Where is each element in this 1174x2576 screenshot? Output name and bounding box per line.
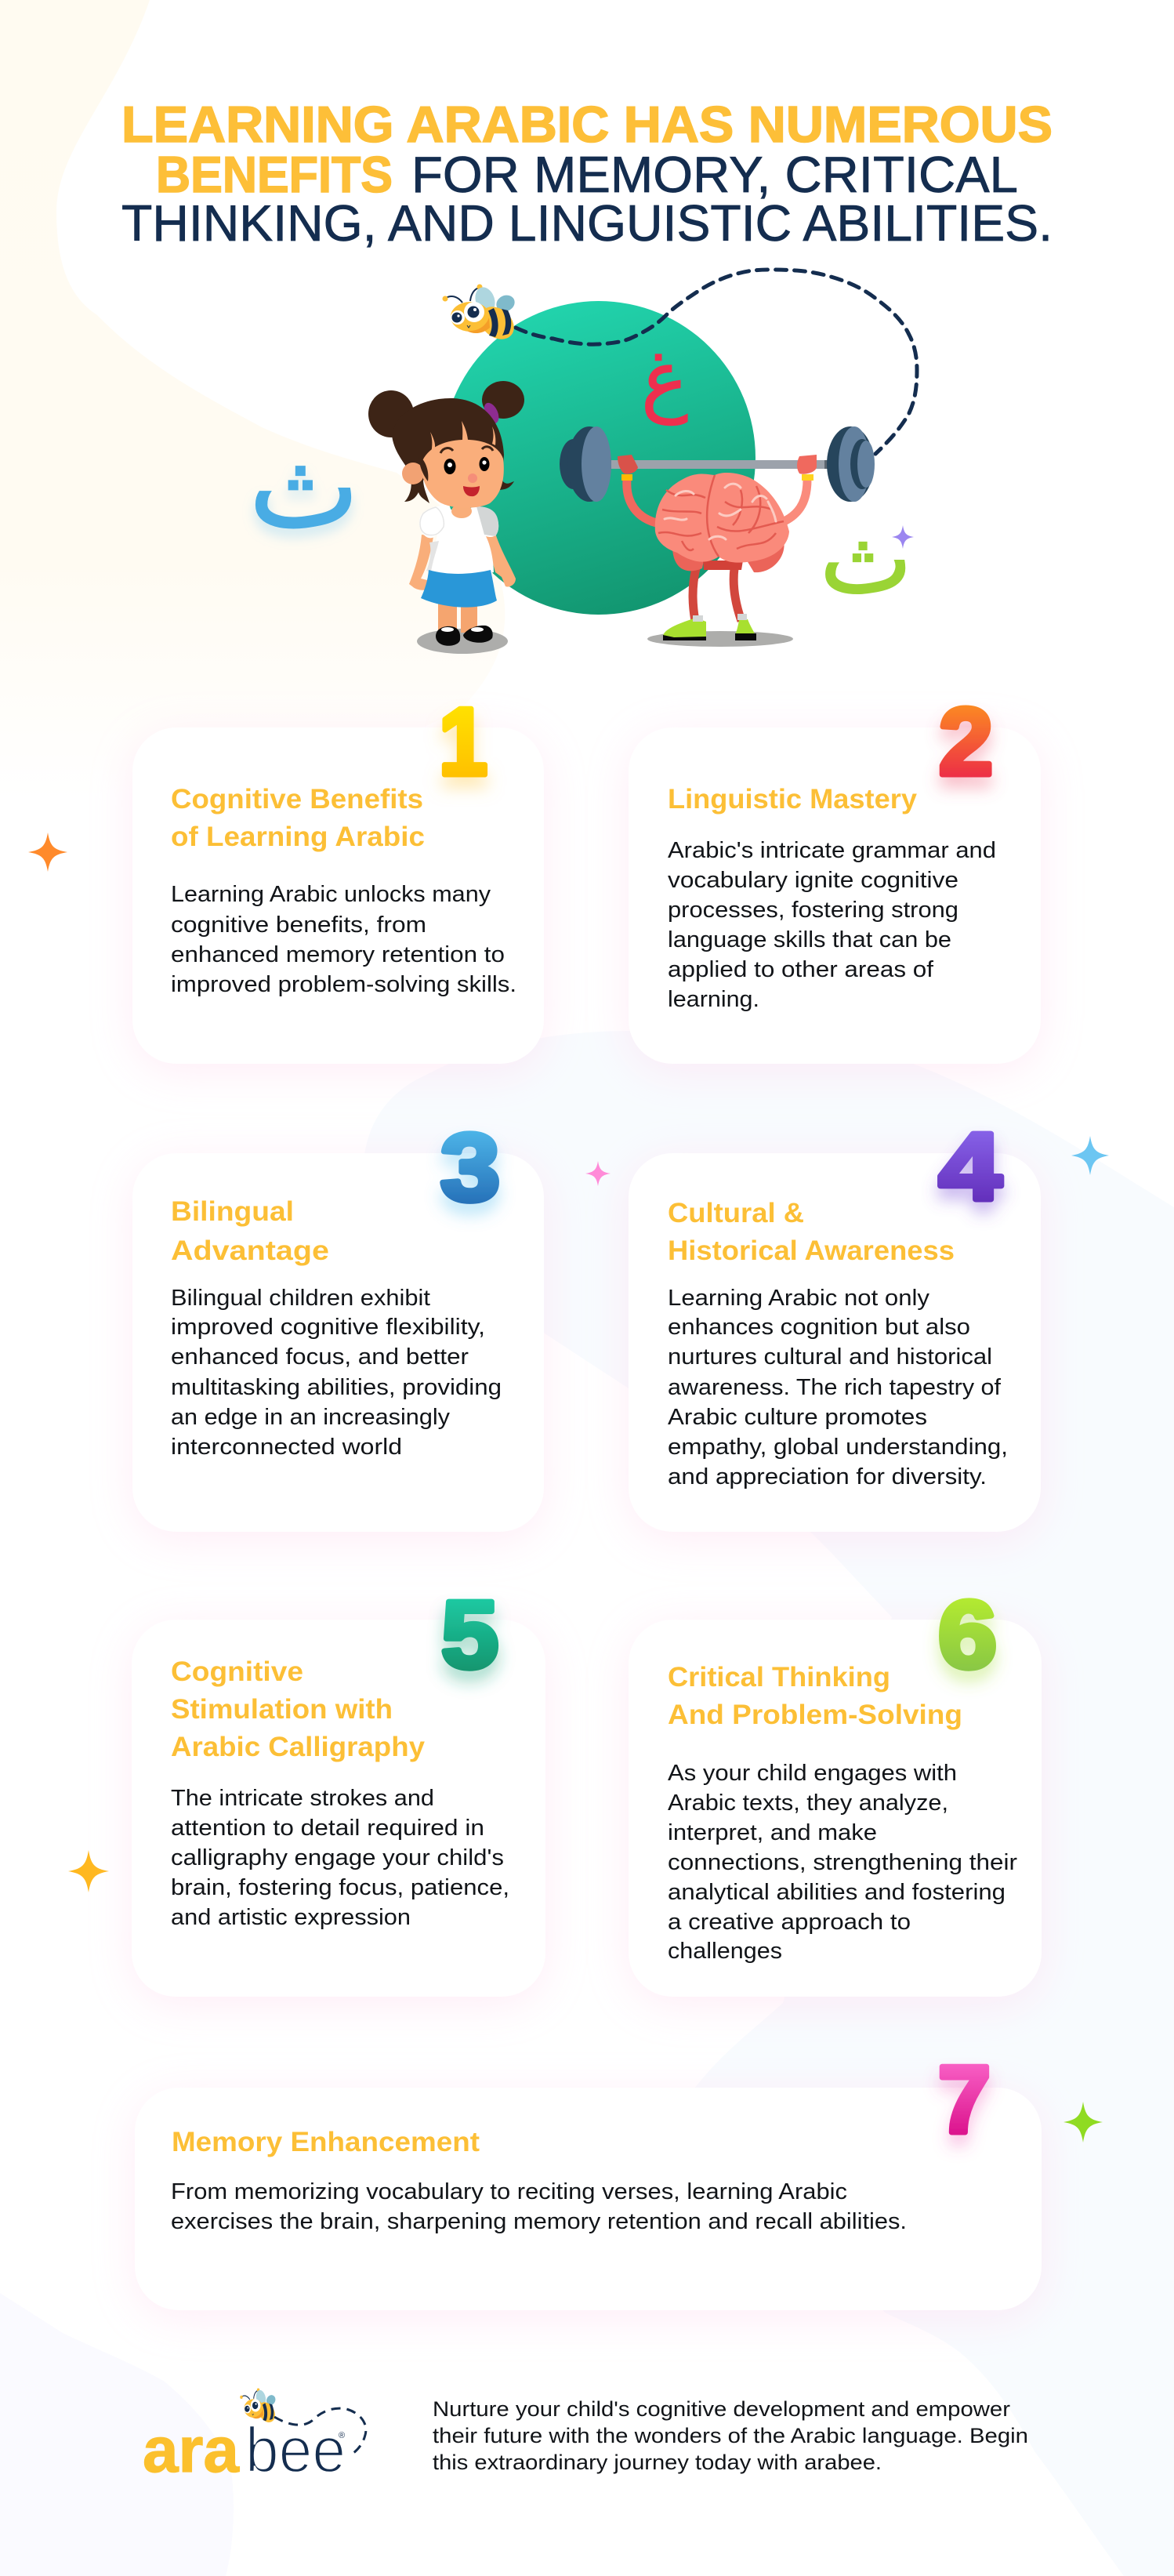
- footer text: Nurture your child's cognitive development and empower: [433, 2397, 1010, 2421]
- body text: The intricate strokes and: [171, 1786, 434, 1811]
- body text: enhances cognition but also: [668, 1315, 970, 1340]
- body text: learning.: [668, 987, 759, 1012]
- heading: Critical Thinking: [668, 1662, 890, 1693]
- heading: [171, 1196, 329, 1266]
- heading: Bilingual: [171, 1196, 294, 1227]
- green circle: [442, 301, 755, 615]
- panel: card 5 calligraphy: [132, 1581, 545, 1997]
- body text: cognitive benefits, from: [171, 912, 426, 938]
- background blob: lavender bottom-left: [0, 2293, 234, 2576]
- body text: [668, 838, 996, 1012]
- heading: [668, 1662, 962, 1730]
- body text: Arabic culture promotes: [668, 1405, 927, 1430]
- panel: card 3 bilingual advantage: [132, 1114, 544, 1532]
- background blob: cream top-left: [0, 0, 505, 800]
- wordmark: ®: [339, 2431, 345, 2440]
- logo: arabee: [143, 2388, 366, 2486]
- body text: nurtures cultural and historical: [668, 1344, 992, 1370]
- body text: From memorizing vocabulary to reciting verses, learning Arabic: [171, 2179, 847, 2204]
- heading: [171, 1656, 426, 1762]
- body text: Arabic's intricate grammar and: [668, 838, 996, 863]
- number 6: 6: [938, 1581, 997, 1688]
- wordmark: ara: [143, 2415, 240, 2486]
- heading: [171, 784, 425, 852]
- panel: card 4 cultural awareness: [629, 1113, 1041, 1532]
- title: [121, 96, 1053, 252]
- heading: Advantage: [171, 1235, 329, 1266]
- footer text: [433, 2397, 1028, 2474]
- body text: calligraphy engage your child's: [171, 1845, 504, 1870]
- wordmark: [143, 2415, 346, 2486]
- body text: and appreciation for diversity.: [668, 1464, 987, 1489]
- heading: Stimulation with: [171, 1694, 393, 1725]
- panel: card 1 cognitive benefits: [132, 688, 544, 1064]
- body text: an edge in an increasingly: [171, 1405, 451, 1430]
- background blob: pale blue: [363, 1030, 1174, 2576]
- sparkle: yellow: [68, 1850, 109, 1892]
- title: FOR MEMORY, CRITICAL: [411, 146, 1018, 203]
- letter: ghain: غ: [641, 333, 688, 425]
- body text: attention to detail required in: [171, 1816, 484, 1841]
- body text: brain, fostering focus, patience,: [171, 1875, 509, 1900]
- body text: interpret, and make: [668, 1820, 877, 1845]
- heading: [668, 1198, 955, 1266]
- brain character: [618, 455, 817, 647]
- sparkle: blue: [1071, 1136, 1109, 1175]
- body text: Learning Arabic not only: [668, 1286, 930, 1311]
- heading: Memory Enhancement: [172, 2127, 480, 2157]
- sparkle: purple: [892, 525, 914, 549]
- heading: of Learning Arabic: [171, 822, 425, 852]
- body text: exercises the brain, sharpening memory retention and recall abilities.: [171, 2209, 907, 2234]
- body text: [171, 1286, 502, 1460]
- body text: enhanced focus, and better: [171, 1344, 469, 1370]
- sparkle: pink: [585, 1161, 611, 1186]
- heading: Historical Awareness: [668, 1235, 955, 1266]
- number 1: 1: [439, 688, 487, 795]
- heading: Cognitive Benefits: [171, 784, 423, 815]
- heading: Linguistic Mastery: [668, 784, 918, 815]
- body text: language skills that can be: [668, 927, 951, 952]
- body text: connections, strengthening their: [668, 1850, 1017, 1875]
- letter: blue tha: ث: [248, 419, 360, 555]
- footer text: their future with the wonders of the Arabic language. Begin: [433, 2424, 1028, 2447]
- panel: card 2 linguistic mastery: [629, 688, 1041, 1064]
- heading: Arabic Calligraphy: [171, 1732, 426, 1762]
- number 5: 5: [441, 1581, 498, 1688]
- body text: improved cognitive flexibility,: [171, 1315, 485, 1340]
- heading: Cognitive: [171, 1656, 303, 1687]
- body text: Learning Arabic unlocks many: [171, 882, 491, 907]
- body text: analytical abilities and fostering: [668, 1880, 1006, 1905]
- number 7: 7: [938, 2046, 991, 2153]
- body text: a creative approach to: [668, 1910, 911, 1935]
- title: LEARNING ARABIC HAS NUMEROUS: [121, 96, 1053, 153]
- body text: applied to other areas of: [668, 957, 934, 982]
- body text: improved problem-solving skills.: [171, 972, 516, 997]
- sparkle: green: [1063, 2102, 1103, 2142]
- illustration: [248, 270, 917, 654]
- heading: Cultural &: [668, 1198, 804, 1228]
- body text: empathy, global understanding,: [668, 1435, 1008, 1460]
- logo dashed path: [274, 2408, 366, 2455]
- icon: small bee: [240, 2388, 278, 2426]
- number 2: 2: [939, 688, 993, 795]
- number 4: 4: [939, 1113, 1002, 1220]
- title: BENEFITS: [156, 146, 393, 203]
- letter: green tha: ث: [820, 503, 912, 616]
- girl: [368, 381, 524, 654]
- number 3: 3: [440, 1114, 500, 1221]
- body text: multitasking abilities, providing: [171, 1375, 502, 1400]
- wordmark: bee: [245, 2415, 346, 2486]
- body text: Arabic texts, they analyze,: [668, 1791, 948, 1816]
- panel: card 7 memory enhancement: [135, 2046, 1042, 2310]
- body text: [171, 2179, 907, 2234]
- dashed flight path: [516, 270, 917, 454]
- body text: processes, fostering strong: [668, 898, 958, 923]
- body text: interconnected world: [171, 1435, 402, 1460]
- body text: vocabulary ignite cognitive: [668, 868, 958, 893]
- body text: [171, 882, 516, 997]
- body text: challenges: [668, 1939, 782, 1964]
- body text: awareness. The rich tapestry of: [668, 1375, 1002, 1400]
- body text: Bilingual children exhibit: [171, 1286, 430, 1311]
- body text: As your child engages with: [668, 1761, 957, 1786]
- footer text: this extraordinary journey today with arabee.: [433, 2451, 882, 2474]
- barbell: [560, 426, 875, 502]
- body text: and artistic expression: [171, 1905, 411, 1930]
- sparkle: orange: [28, 833, 67, 872]
- icon: bee: [442, 284, 520, 346]
- panel: card 6 critical thinking: [629, 1581, 1042, 1997]
- body text: enhanced memory retention to: [171, 942, 505, 967]
- body text: [171, 1786, 509, 1930]
- heading: And Problem-Solving: [668, 1700, 962, 1730]
- body text: [668, 1761, 1017, 1964]
- title: THINKING, AND LINGUISTIC ABILITIES.: [121, 194, 1053, 252]
- body text: [668, 1286, 1008, 1489]
